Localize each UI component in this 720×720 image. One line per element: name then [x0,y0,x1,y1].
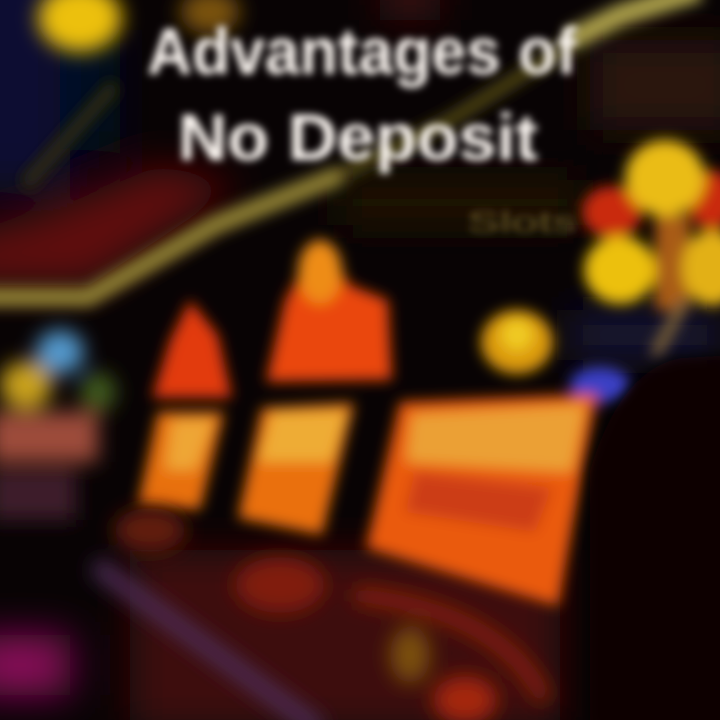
title: Advantages of [147,14,578,88]
lower console [95,508,545,720]
dark silhouette [590,355,720,720]
slot machine: narrow [138,300,232,510]
left slot machine [0,330,116,520]
main slot screen [366,367,630,606]
gold ceiling rail [0,0,700,297]
slot machine: middle [238,238,392,535]
title [147,14,578,174]
top lamps [38,0,240,52]
small caption: Slots [467,206,577,239]
small top lamp [481,310,553,374]
title: No Deposit [178,100,538,174]
balloon cluster lamp [582,140,720,355]
